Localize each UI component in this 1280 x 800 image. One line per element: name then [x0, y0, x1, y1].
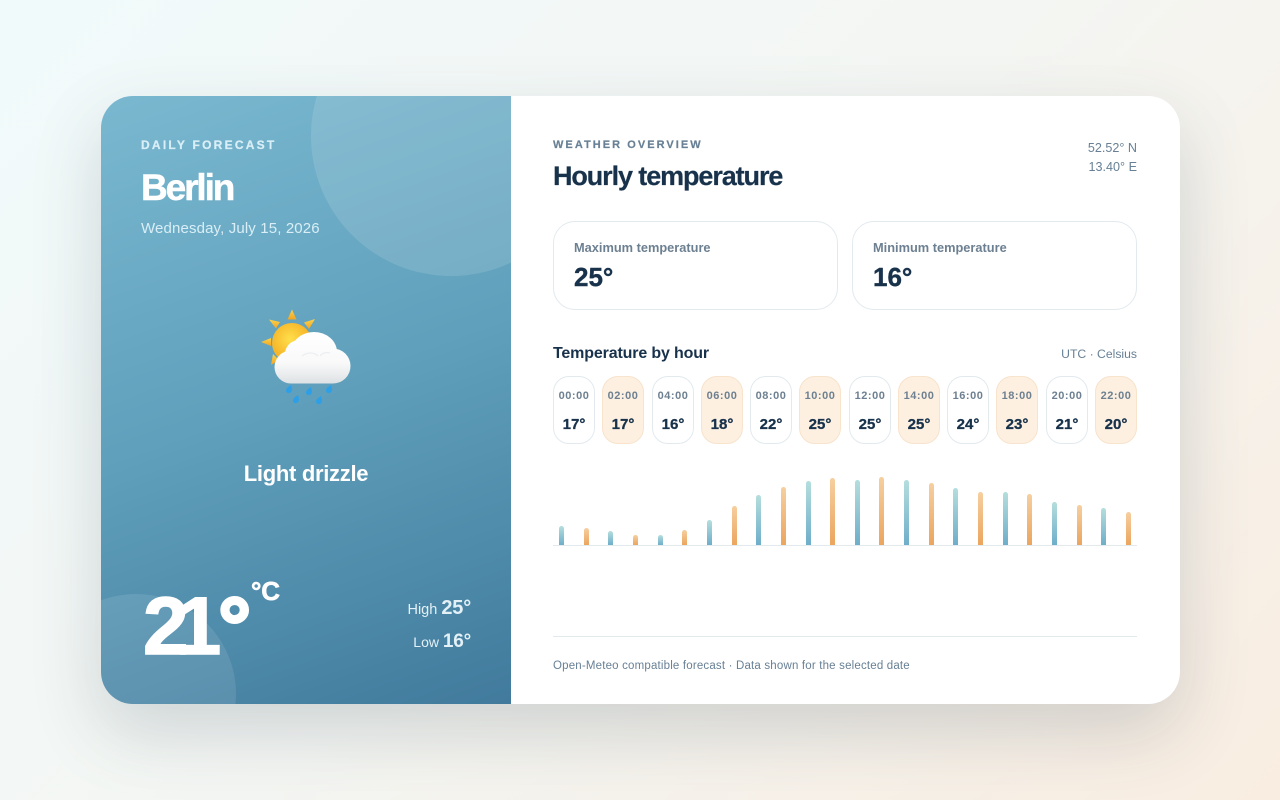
icon: sun behind rain cloud — [261, 310, 350, 404]
stat label: Minimum temperature — [873, 240, 1007, 255]
tile 16:00: 24° — [957, 416, 979, 433]
tile 20:00 — [1046, 376, 1088, 444]
tile 04:00: 04:00 — [658, 390, 688, 402]
tile 02:00: 17° — [612, 416, 634, 433]
bar chart: hourly temperature — [553, 477, 1137, 546]
tile 20:00: 20:00 — [1052, 390, 1082, 402]
eyebrow: weather overview: WEATHER OVERVIEW — [553, 139, 703, 151]
tile 06:00 — [701, 376, 743, 444]
decorative circle: top right — [311, 0, 591, 276]
panel: daily forecast — [101, 96, 511, 704]
tile 12:00: 12:00 — [855, 390, 885, 402]
footer note: Open-Meteo compatible forecast · Data shown for the selected date — [553, 660, 910, 672]
coordinates: 52.52° N — [1088, 141, 1137, 155]
coordinates — [1088, 141, 1137, 174]
temperature unit: °C — [251, 576, 280, 606]
condition label: Light drizzle — [244, 461, 368, 486]
tile 16:00 — [947, 376, 989, 444]
tile 12:00 — [849, 376, 891, 444]
tile 00:00: 17° — [563, 416, 585, 433]
weather card — [101, 96, 1180, 704]
tile 14:00: 14:00 — [904, 390, 934, 402]
tile 22:00 — [1095, 376, 1137, 444]
tile 04:00: 16° — [662, 416, 684, 433]
city name: Berlin — [141, 167, 233, 208]
tile 22:00: 22:00 — [1101, 390, 1131, 402]
tile 18:00: 23° — [1006, 416, 1028, 433]
tile 08:00 — [750, 376, 792, 444]
tile 10:00 — [799, 376, 841, 444]
tile 12:00: 25° — [859, 416, 881, 433]
tile 06:00: 06:00 — [707, 390, 737, 402]
tile 08:00: 08:00 — [756, 390, 786, 402]
tile 14:00: 25° — [908, 416, 930, 433]
date: Wednesday, July 15, 2026 — [141, 220, 320, 237]
tile 08:00: 22° — [760, 416, 782, 433]
hourly tiles — [553, 376, 1137, 444]
tile 14:00 — [898, 376, 940, 444]
coordinates: 13.40° E — [1089, 160, 1137, 174]
decorative circle: bottom left — [36, 594, 236, 794]
heading: hourly temperature: Hourly temperature — [553, 161, 782, 191]
tile 18:00 — [996, 376, 1038, 444]
low temperature: Low 16° — [413, 631, 471, 652]
tile 18:00: 18:00 — [1002, 390, 1032, 402]
tile 10:00: 10:00 — [805, 390, 835, 402]
tile 00:00 — [553, 376, 595, 444]
tile 20:00: 21° — [1056, 416, 1078, 433]
units note: UTC · Celsius — [1061, 347, 1137, 361]
stat value: 16° — [873, 262, 912, 292]
stat: minimum temperature — [852, 221, 1137, 310]
tile 02:00 — [602, 376, 644, 444]
tile 10:00: 25° — [809, 416, 831, 433]
stat: maximum temperature — [553, 221, 838, 310]
stat label: Maximum temperature — [574, 240, 711, 255]
tile 16:00: 16:00 — [953, 390, 983, 402]
eyebrow: daily forecast: DAILY FORECAST — [141, 138, 277, 152]
stat value: 25° — [574, 262, 613, 292]
tile 22:00: 20° — [1105, 416, 1127, 433]
tile 06:00: 18° — [711, 416, 733, 433]
tile 02:00: 02:00 — [608, 390, 638, 402]
tile 04:00 — [652, 376, 694, 444]
current temperature: 21° — [143, 581, 245, 672]
high temperature: High 25° — [407, 597, 471, 619]
subheading: temperature by hour: Temperature by hour — [553, 345, 709, 362]
tile 00:00: 00:00 — [559, 390, 589, 402]
